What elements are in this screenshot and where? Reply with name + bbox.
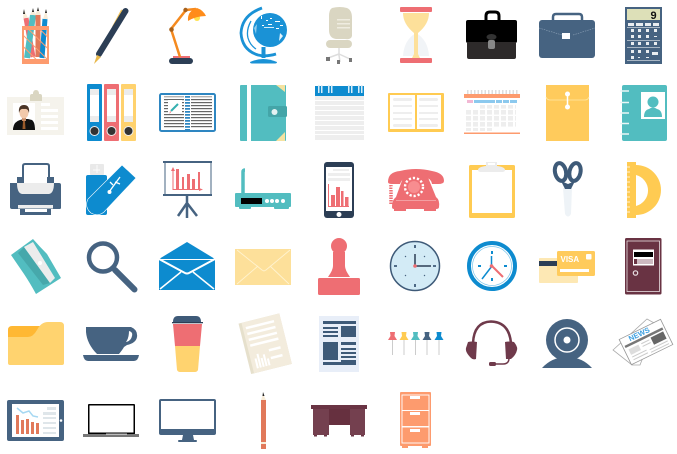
icon: folder bbox=[8, 322, 64, 365]
icon: desktop monitor bbox=[159, 399, 216, 442]
icon: office desk bbox=[311, 405, 367, 436]
icon: safe door bbox=[625, 238, 662, 294]
icon: open blue envelope bbox=[159, 242, 215, 290]
icon: laptop bbox=[83, 404, 139, 437]
icon: scissors bbox=[553, 162, 582, 216]
icon: folded newspaper: NEWS bbox=[627, 325, 651, 343]
icon: pencil sharpener bbox=[11, 239, 61, 294]
icon: document sheets bbox=[239, 313, 292, 374]
icon: fountain pen bbox=[94, 10, 126, 64]
icon: teal organizer bbox=[240, 85, 287, 141]
icon: calculator bbox=[625, 7, 662, 64]
icon: black briefcase bbox=[466, 12, 517, 59]
icon: printer bbox=[10, 164, 61, 215]
icon: rotary telephone bbox=[388, 169, 444, 211]
icon: string-tie envelope bbox=[546, 85, 589, 141]
icon: takeaway coffee cup bbox=[172, 316, 203, 372]
icon: wall calendar bbox=[464, 92, 520, 134]
icon: contact book bbox=[620, 85, 667, 141]
icon: globe bbox=[241, 8, 287, 64]
icon: desk lamp bbox=[169, 8, 206, 64]
icon: open notebook with pen bbox=[160, 94, 215, 131]
icon: binders bbox=[87, 84, 136, 141]
icon: rubber stamp bbox=[318, 238, 360, 295]
icon: pencil cup bbox=[22, 7, 49, 64]
icon: router bbox=[235, 170, 291, 209]
icon: cream envelope bbox=[235, 249, 291, 285]
icon: protractor bbox=[627, 162, 661, 218]
icon: credit cards: VISA bbox=[560, 255, 579, 264]
icon: USB drive bbox=[86, 164, 136, 215]
icon: blue briefcase bbox=[539, 14, 595, 58]
icon: open yellow book bbox=[388, 93, 444, 132]
icon: hourglass bbox=[400, 7, 432, 63]
icon: headset bbox=[466, 322, 517, 366]
icon: clipboard bbox=[469, 162, 515, 218]
icon: magnifying glass bbox=[89, 244, 134, 290]
icon: ID badge bbox=[7, 90, 64, 135]
icon: coffee cup on saucer bbox=[83, 327, 139, 361]
icon: calculator: 9 bbox=[650, 10, 657, 22]
icon: folded newspaper bbox=[613, 319, 673, 365]
icon: filing cabinet bbox=[400, 392, 431, 448]
icon: pencil bbox=[261, 392, 266, 449]
icon: office chair bbox=[326, 7, 352, 64]
icon: spiral notepad bbox=[315, 85, 364, 140]
icon: blue clock bbox=[469, 243, 515, 289]
icon: credit cards bbox=[539, 251, 595, 283]
icon: webcam bbox=[542, 319, 592, 368]
icon: wall clock bbox=[390, 242, 440, 290]
icon: newspaper page bbox=[319, 316, 359, 372]
icon: smartphone chart bbox=[324, 162, 354, 218]
icon: presentation board bbox=[163, 161, 212, 218]
icon: push pins bbox=[388, 332, 444, 355]
icon: tablet chart bbox=[7, 400, 64, 441]
